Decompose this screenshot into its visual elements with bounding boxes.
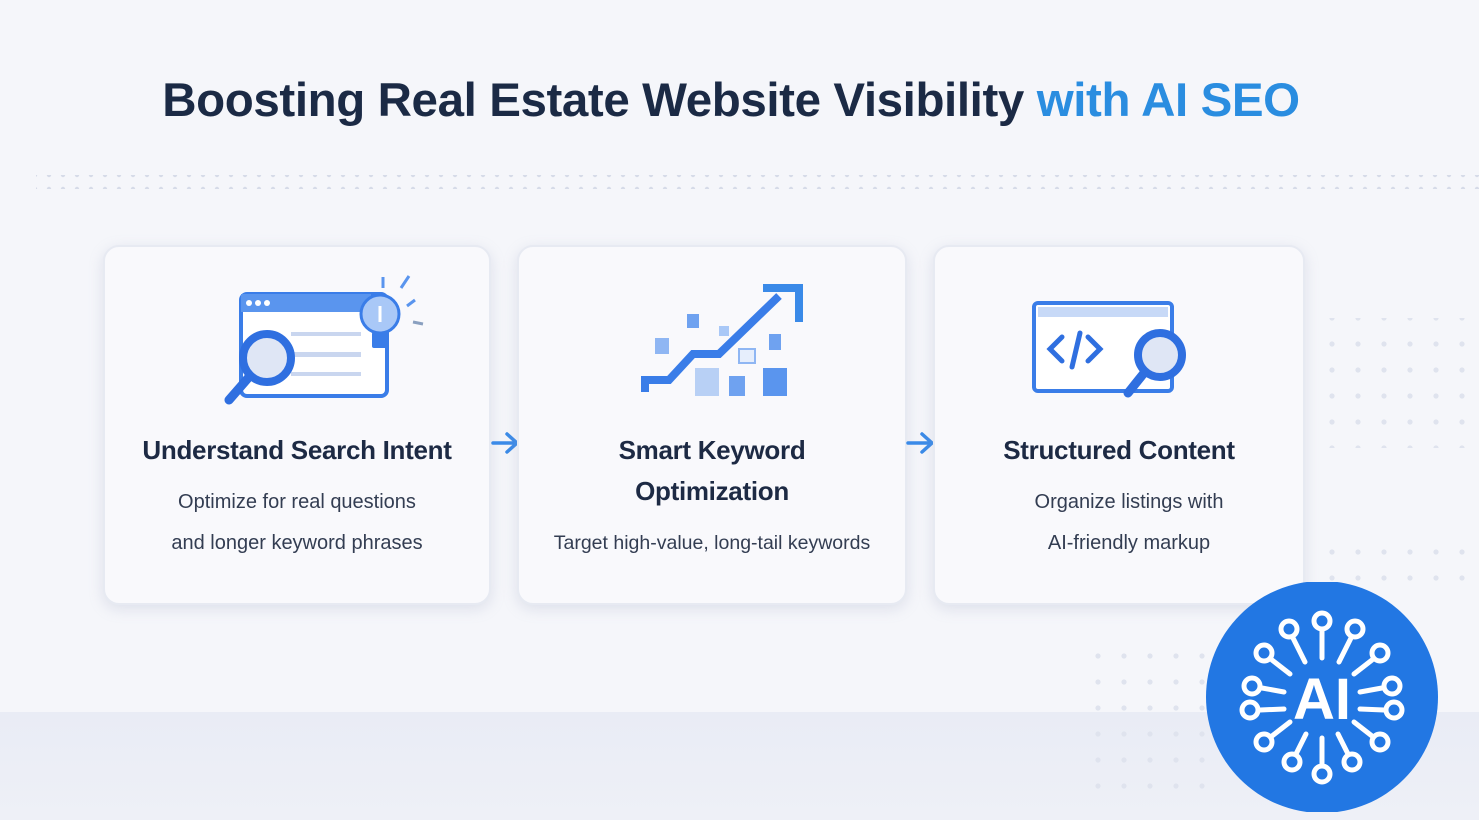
panel: understand search intent: Optimize for real questions <box>178 491 416 513</box>
panel: understand search intent: and longer keyword phrases <box>171 532 423 554</box>
arrow 2 <box>906 432 933 454</box>
panel: smart keyword optimization: Optimization <box>635 476 789 506</box>
panel: structured content: Organize listings with <box>1035 491 1223 513</box>
icon: code window with magnifier <box>1032 301 1186 398</box>
panel: structured content: AI-friendly markup <box>1048 532 1210 554</box>
panel: structured content: Structured Content <box>1003 435 1235 465</box>
panel: smart keyword optimization: Target high-value, long-tail keywords <box>554 532 870 554</box>
icon: growth chart <box>641 284 803 396</box>
panel: understand search intent <box>103 245 491 605</box>
panel: smart keyword optimization: Smart Keyword <box>619 435 805 465</box>
title: Boosting Real Estate Website Visibility with AI SEO <box>162 74 1300 127</box>
panel: structured content <box>933 245 1305 605</box>
icon: AI badge: AI <box>1293 667 1351 732</box>
icon: browser with magnifier and bulb <box>224 275 424 404</box>
panel: smart keyword optimization <box>517 245 907 605</box>
icon: AI badge <box>1206 582 1438 812</box>
panel: understand search intent: Understand Search Intent <box>142 435 452 465</box>
arrow 1 <box>491 432 517 454</box>
